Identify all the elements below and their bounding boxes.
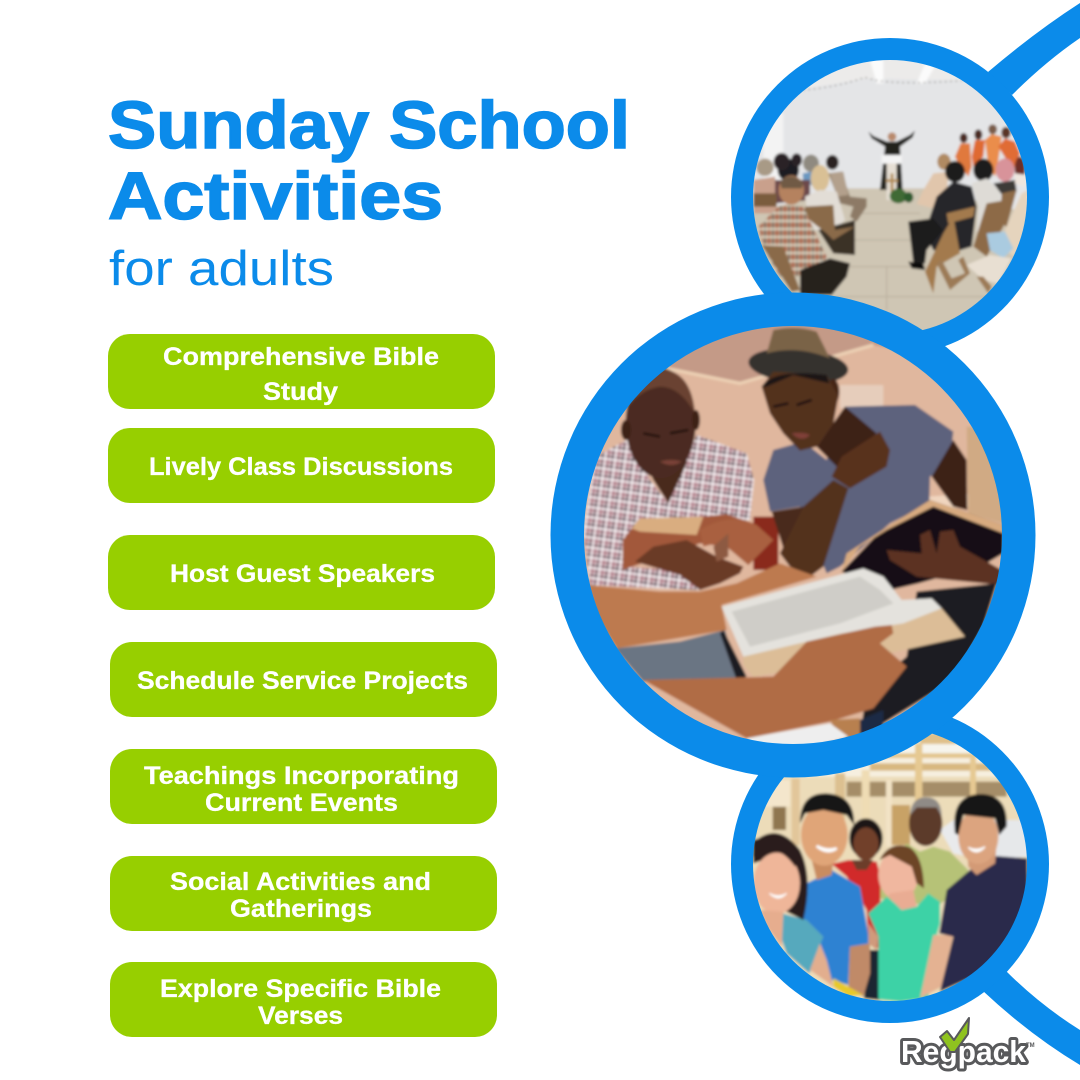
- choir: [955, 143, 972, 177]
- item: Teachings Incorporating Current Events: [110, 749, 497, 824]
- list of activities: [108, 334, 497, 1037]
- man with hat: head: [747, 348, 850, 382]
- item: Schedule Service Projects: Schedule Service Projects: [137, 667, 468, 695]
- dark book and hand: [842, 500, 1003, 590]
- dark trousers: [860, 583, 997, 737]
- open white bible: [906, 606, 967, 652]
- item: Explore Specific Bible Verses: Explore Specific Bible: [160, 975, 441, 1003]
- woman in green: [868, 893, 940, 1002]
- item: Social Activities and Gatherings: [110, 856, 497, 931]
- item: Social Activities and Gatherings: Gatherings: [230, 895, 372, 923]
- logo trademark: TM: [1026, 1043, 1035, 1049]
- man in blue: [800, 870, 870, 985]
- brown book and hand: [620, 512, 746, 570]
- item: Social Activities and Gatherings: Social Activities and: [170, 868, 431, 896]
- pastor: [868, 131, 915, 190]
- title: [108, 88, 630, 234]
- item: Host Guest Speakers: [108, 535, 495, 610]
- top right connector arc: [988, 3, 1080, 95]
- item: Comprehensive Bible Study: Study: [263, 378, 338, 406]
- middle photo ring: [550, 292, 1036, 778]
- woman in teal: [780, 912, 824, 974]
- title: Sunday School: [108, 88, 630, 163]
- jeans: [615, 630, 740, 682]
- item: Schedule Service Projects: [110, 642, 497, 717]
- item: Lively Class Discussions: Lively Class Discussions: [149, 453, 453, 481]
- man with plaid shirt: [583, 435, 754, 590]
- item: Teachings Incorporating Current Events: Current Events: [205, 789, 398, 817]
- older man: [879, 843, 968, 907]
- logo wordmark: Regpack: [901, 1034, 1027, 1069]
- man in dark shirt: [920, 935, 953, 998]
- title: Activities: [108, 159, 443, 234]
- item: Lively Class Discussions: [108, 428, 495, 503]
- man with hat: arms and neck: [932, 440, 967, 510]
- top photo ring: [731, 38, 1049, 356]
- item: Teachings Incorporating Current Events: Teachings Incorporating: [144, 762, 459, 790]
- item: Host Guest Speakers: Host Guest Speakers: [170, 560, 435, 588]
- person in tan shirt: [967, 427, 1003, 523]
- reader's near arm: [643, 625, 907, 738]
- logo check mark: [940, 1018, 969, 1052]
- photo: congregation in a white room: [750, 57, 1030, 337]
- photo: smiling volunteers at a construction site: [750, 720, 1030, 1007]
- item: Explore Specific Bible Verses: [110, 962, 497, 1037]
- left audience: [756, 159, 774, 176]
- Regpack logo: [901, 1018, 1035, 1069]
- man with hat: shirt: [763, 405, 953, 573]
- photo: men reading bibles together: [580, 323, 1007, 752]
- bottom right connector arc: [983, 971, 1080, 1065]
- item: Comprehensive Bible Study: Comprehensive Bible: [163, 343, 439, 371]
- right audience: [937, 154, 951, 170]
- woman in red: [832, 860, 881, 950]
- jeans: [864, 950, 880, 1000]
- subtitle: for adults: [109, 242, 334, 296]
- item: Explore Specific Bible Verses: Verses: [258, 1002, 343, 1030]
- bottom photo ring: [731, 705, 1049, 1023]
- item: Comprehensive Bible Study: [108, 334, 495, 409]
- reader's far arm: [588, 563, 817, 648]
